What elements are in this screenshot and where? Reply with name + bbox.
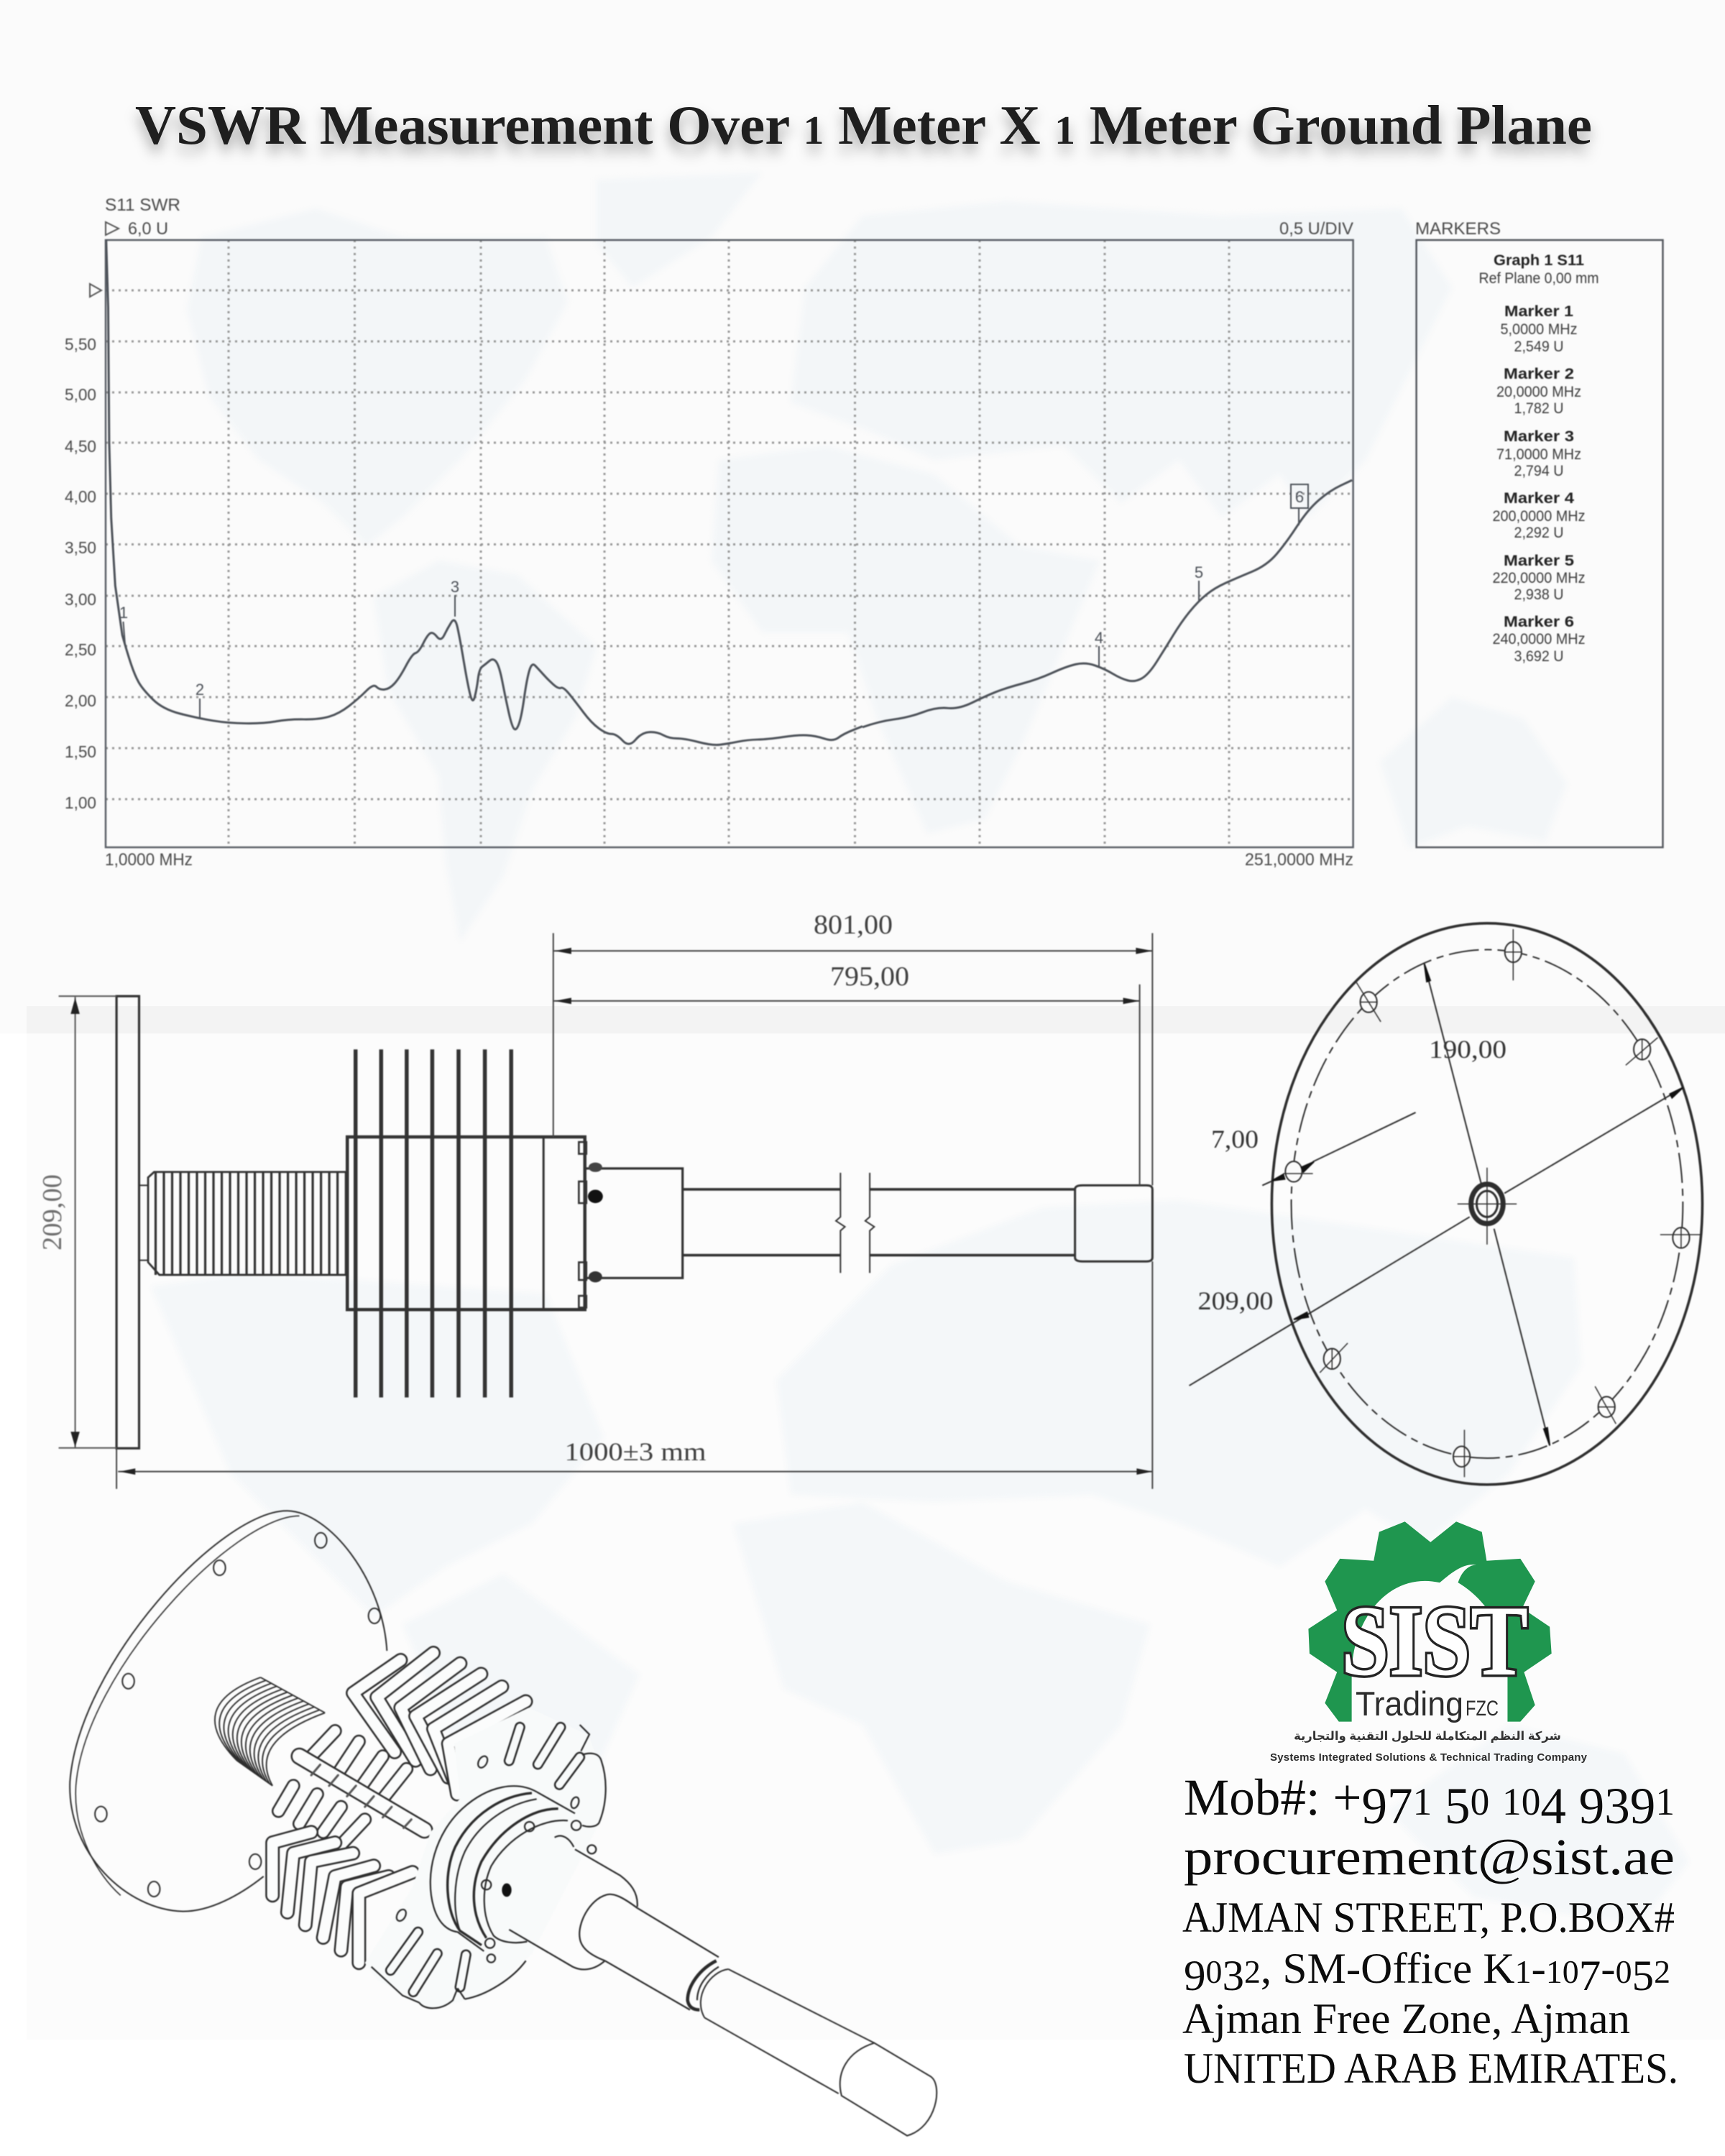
y axis labels xyxy=(65,335,96,812)
panel: 3D isometric view of the antenna xyxy=(70,1511,937,2136)
centre hub xyxy=(1458,1168,1517,1245)
chart header and axis captions: 6,0 U xyxy=(128,219,168,239)
markers readout: 240,0000 MHz xyxy=(1492,631,1586,648)
y axis labels: 5,50 xyxy=(65,335,96,354)
address lines: UNITED ARAB EMIRATES. xyxy=(1184,2045,1678,2092)
panel: S11 SWR chart xyxy=(65,195,1353,870)
y axis labels: 3,50 xyxy=(65,538,96,557)
heat sink body and fins xyxy=(347,1049,585,1398)
upper fins xyxy=(353,1653,525,1795)
markers frame xyxy=(1417,240,1663,847)
markers readout: Marker 6 xyxy=(1504,614,1574,630)
chart header and axis captions: 251,0000 MHz xyxy=(1245,850,1353,870)
curve markers 1 to 6 xyxy=(119,484,1308,718)
chart header and axis captions: S11 SWR xyxy=(105,195,180,215)
address lines: AJMAN STREET, P.O.BOX# xyxy=(1182,1894,1675,1941)
markers readout: 200,0000 MHz xyxy=(1492,508,1586,525)
markers readout: Marker 2 xyxy=(1504,366,1574,382)
address lines: Ajman Free Zone, Ajman xyxy=(1182,1995,1630,2042)
markers readout: 1,782 U xyxy=(1514,400,1564,417)
title: VSWR Measurement Over 1 Meter X 1 Meter Ground Plane xyxy=(135,94,1592,156)
logo: SIST Trading FZC xyxy=(1270,1521,1588,1764)
front disc backing xyxy=(365,1708,606,2009)
tube first section xyxy=(579,1894,719,2010)
logo SIST wordmark: SIST xyxy=(1341,1585,1528,1697)
logo arabic name: شركة النظم المتكاملة للحلول التقنية والتجارية xyxy=(1294,1730,1561,1743)
ground plate xyxy=(116,996,139,1448)
bolt circle xyxy=(1292,949,1683,1458)
markers readout: 5,0000 MHz xyxy=(1501,321,1577,338)
chart frame xyxy=(106,240,1353,847)
y axis labels: 1,00 xyxy=(65,793,96,812)
tube with break xyxy=(683,1173,1075,1273)
y axis labels: 3,00 xyxy=(65,590,96,609)
curve markers 1 to 6: 1 xyxy=(119,604,128,622)
stub fins and stud tip xyxy=(278,1731,425,1845)
logo gear xyxy=(1308,1521,1552,1722)
dimension lines on flange xyxy=(1190,964,1683,1445)
panel: flange front view xyxy=(1190,923,1703,1485)
end cap xyxy=(1075,1185,1152,1261)
y axis labels: 2,00 xyxy=(65,691,96,710)
background: faint world map lower xyxy=(151,1200,1689,1926)
dimension labels: 209,00 xyxy=(37,1174,68,1250)
chart grid xyxy=(106,240,1353,847)
markers readout: 2,549 U xyxy=(1514,338,1564,355)
dimension labels: 801,00 xyxy=(814,910,893,940)
address lines xyxy=(1182,1894,1678,2092)
y axis labels: 2,50 xyxy=(65,640,96,659)
panel: markers table xyxy=(1415,219,1663,847)
markers readout: Marker 3 xyxy=(1504,428,1574,445)
flange dimension labels: 190,00 xyxy=(1429,1035,1506,1064)
markers readout: 2,938 U xyxy=(1514,586,1564,603)
logo FZC: FZC xyxy=(1466,1697,1499,1720)
threaded stud xyxy=(139,1172,346,1275)
curve markers 1 to 6: 2 xyxy=(196,681,204,699)
contact details xyxy=(1182,1769,1678,2092)
markers readout: 3,692 U xyxy=(1514,648,1564,665)
markers readout: Marker 4 xyxy=(1504,490,1574,507)
dimension lines xyxy=(116,933,1152,1489)
hub rings xyxy=(431,1786,596,1963)
flange dimension labels: 209,00 xyxy=(1197,1286,1274,1315)
email: procurement@sist.ae xyxy=(1184,1828,1675,1886)
address lines: 9032, SM-Office K1-107-052 xyxy=(1184,1945,1670,1999)
ground plate xyxy=(70,1511,387,1912)
chart header and axis captions: 1,0000 MHz xyxy=(105,850,193,870)
disc slots xyxy=(390,1727,580,1992)
connector and bolts xyxy=(579,1142,683,1307)
y axis labels: 4,00 xyxy=(65,487,96,506)
y axis labels: 1,50 xyxy=(65,742,96,761)
y axis labels: 5,00 xyxy=(65,385,96,404)
background: faint world map upper xyxy=(187,172,1567,941)
tube second section and end cap xyxy=(701,1969,937,2136)
y axis labels: 4,50 xyxy=(65,437,96,456)
markers readout xyxy=(1479,252,1598,665)
markers readout: Marker 1 xyxy=(1504,303,1573,320)
markers readout: Ref Plane 0,00 mm xyxy=(1479,270,1598,287)
markers readout: 2,794 U xyxy=(1514,463,1564,479)
curve markers 1 to 6: 3 xyxy=(451,578,459,596)
chart header and axis captions xyxy=(105,195,1353,870)
markers readout: 20,0000 MHz xyxy=(1496,384,1581,400)
logo english name: Systems Integrated Solutions & Technical Trading Company xyxy=(1270,1751,1588,1764)
markers readout: 2,292 U xyxy=(1514,525,1564,541)
curve markers 1 to 6: 6 xyxy=(1295,488,1304,506)
logo Trading: Trading xyxy=(1356,1685,1463,1723)
markers caption: MARKERS xyxy=(1415,219,1501,239)
lower fins xyxy=(272,1832,413,1963)
dimension labels: 1000±3 mm xyxy=(565,1437,706,1466)
disc outline and mounting holes xyxy=(372,1725,606,2008)
SWR curve xyxy=(106,240,1352,745)
chart header and axis captions: 0,5 U/DIV xyxy=(1279,219,1353,239)
flange outer edge xyxy=(1271,923,1703,1485)
markers readout: 220,0000 MHz xyxy=(1492,570,1586,586)
threaded stud xyxy=(215,1677,325,1786)
panel: side view drawing xyxy=(37,910,1152,1489)
reference triangles xyxy=(90,222,119,297)
markers readout: 71,0000 MHz xyxy=(1496,446,1581,463)
flange dimension labels: 7,00 xyxy=(1211,1125,1259,1153)
phone: Mob#: +971 50 104 9391 xyxy=(1184,1769,1675,1835)
dimension labels: 795,00 xyxy=(830,962,909,992)
markers readout: Graph 1 S11 xyxy=(1494,252,1584,269)
dimension labels xyxy=(37,910,909,1466)
curve markers 1 to 6: 4 xyxy=(1095,629,1103,647)
curve markers 1 to 6: 5 xyxy=(1195,563,1203,581)
connector body xyxy=(509,1849,638,1969)
plate height dimension xyxy=(59,996,116,1448)
markers readout: Marker 5 xyxy=(1504,553,1574,569)
flange dimension labels xyxy=(1197,1035,1506,1315)
bolt holes xyxy=(1262,929,1701,1477)
